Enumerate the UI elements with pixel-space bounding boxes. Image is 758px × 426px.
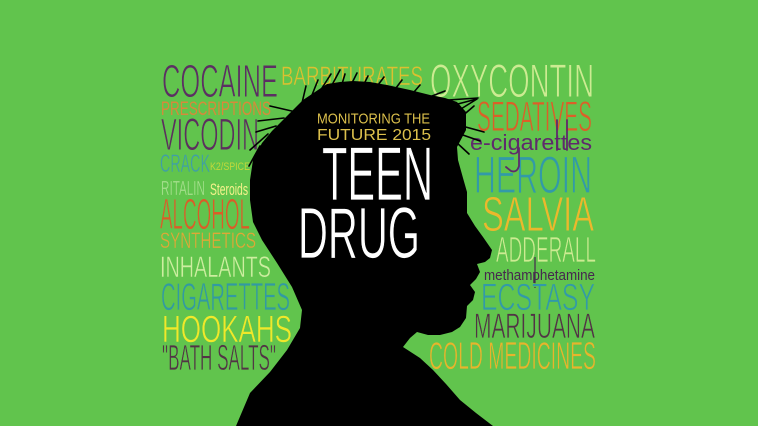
word: COLD MEDICINES: COLD MEDICINES bbox=[429, 335, 596, 378]
word: INHALANTS: INHALANTS bbox=[160, 251, 271, 284]
word: MARIJUANA: MARIJUANA bbox=[474, 307, 595, 346]
word cloud: left column bbox=[160, 55, 292, 378]
word: PRESCRIPTIONS: PRESCRIPTIONS bbox=[161, 99, 271, 120]
word cloud: right column bbox=[281, 54, 596, 378]
title block bbox=[298, 112, 433, 274]
word: K2/SPICE: K2/SPICE bbox=[210, 161, 250, 173]
subtitle: Monitoring the Future 2015: FUTURE 2015 bbox=[317, 127, 431, 144]
word: OXYCONTIN: OXYCONTIN bbox=[430, 54, 594, 107]
headline: TEEN: TEEN bbox=[322, 132, 433, 217]
word: ECSTASY: ECSTASY bbox=[481, 277, 595, 319]
word: BARBITURATES: BARBITURATES bbox=[281, 61, 423, 91]
word: methamphetamine bbox=[484, 257, 595, 288]
hair spikes bbox=[249, 70, 484, 166]
word: SYNTHETICS: SYNTHETICS bbox=[160, 228, 256, 253]
subtitle: Monitoring the Future 2015 bbox=[317, 112, 431, 144]
subtitle: Monitoring the Future 2015: MONITORING THE bbox=[317, 112, 430, 128]
word: methamphetamine: methamphetamine bbox=[484, 267, 595, 284]
word: CRACK: CRACK bbox=[160, 150, 210, 178]
word cloud: left column: ALCOHOL bbox=[160, 190, 250, 239]
word: RITALIN: RITALIN bbox=[161, 178, 205, 200]
word: CIGARETTES: CIGARETTES bbox=[161, 276, 290, 319]
word: HEROIN: HEROIN bbox=[474, 146, 592, 205]
word: ADDERALL: ADDERALL bbox=[496, 229, 596, 270]
word cloud: left column: "BATH SALTS" bbox=[162, 337, 276, 378]
word: VICODIN: VICODIN bbox=[161, 109, 259, 160]
word: COCAINE: COCAINE bbox=[162, 55, 278, 107]
word: Steroids: Steroids bbox=[210, 180, 248, 199]
word: HOOKAHS: HOOKAHS bbox=[162, 309, 292, 351]
word: SALVIA: SALVIA bbox=[482, 188, 594, 242]
infographic canvas: SEDATIVES bbox=[477, 93, 592, 141]
headline: DRUG: DRUG bbox=[298, 194, 420, 274]
word: e-cigarettes: e-cigarettes bbox=[470, 130, 592, 155]
silhouette: teen head in profile bbox=[236, 70, 493, 426]
word: e-cigarettes bbox=[470, 120, 592, 171]
